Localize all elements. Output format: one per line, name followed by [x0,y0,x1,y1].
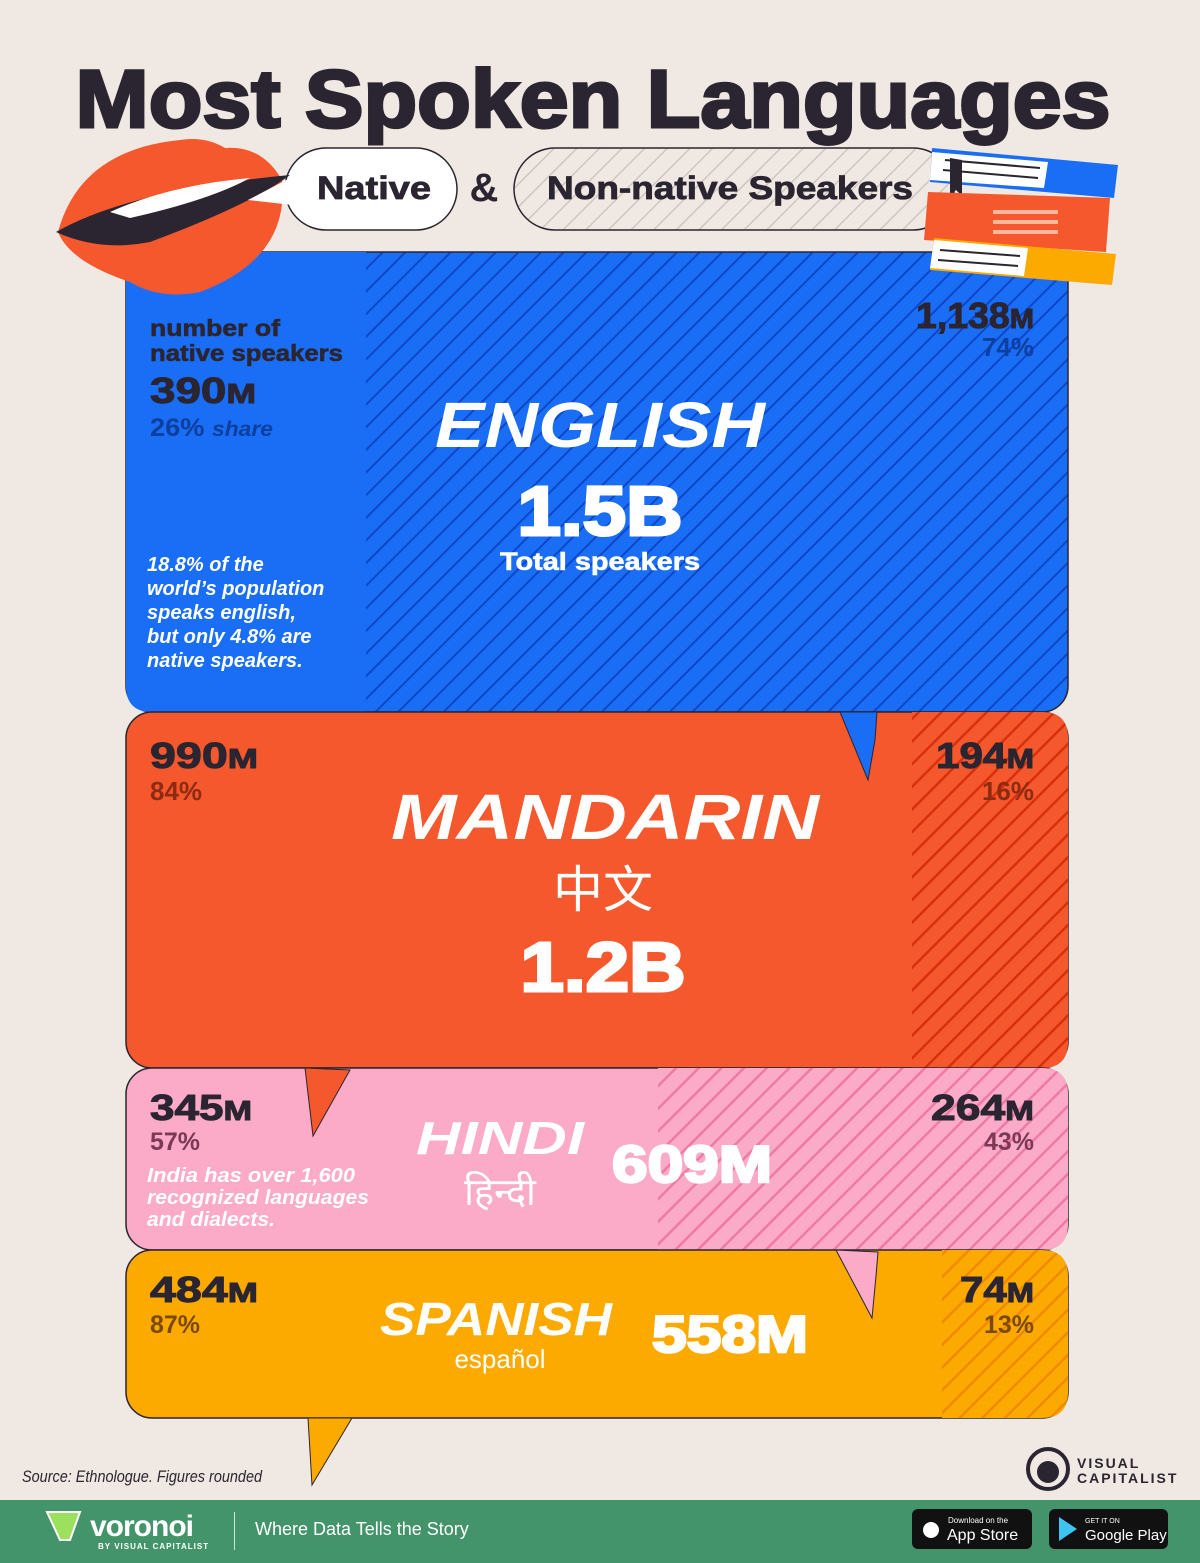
icon: books [924,148,1118,285]
hindi non-native value: 264 M [931,1087,1034,1128]
english panel: Total speakers [500,548,700,576]
spanish total: 558M [652,1306,808,1364]
english note: 18.8% of the [147,554,264,576]
english name: ENGLISH [435,389,767,461]
hindi note: and dialects. [147,1209,275,1231]
visual capitalist logo: VISUAL [1077,1455,1140,1471]
english native value: 390 M [150,370,256,411]
hindi note: India has over 1,600 [147,1165,355,1187]
subtitle: non-native pill: Non-native Speakers [547,170,913,206]
footer bar: BY VISUAL CAPITALIST [98,1542,209,1551]
english panel [126,252,1068,712]
title: Most Spoken Languages [76,54,1110,145]
subtitle: non-native pill [514,148,954,230]
hindi total: 609M [612,1136,772,1194]
hindi note: recognized languages [147,1187,369,1209]
visual capitalist logo [1028,1449,1178,1489]
hindi panel [126,1068,1068,1250]
spanish panel [126,1250,1068,1485]
mandarin native value: 990 M [150,735,258,776]
mandarin panel: 84% [150,776,202,806]
spanish native value: 484 M [150,1269,258,1310]
hindi panel: 57% [150,1128,200,1156]
visual capitalist logo: CAPITALIST [1077,1470,1178,1486]
english note: native speakers. [147,650,303,672]
hindi native value: 345 M [150,1087,252,1128]
app store badge: App Store [947,1527,1018,1544]
subtitle: native pill [285,148,457,230]
mandarin name: MANDARIN [391,781,821,853]
hindi name: HINDI [416,1112,586,1164]
english panel: 74% [982,332,1034,362]
tagline: Where Data Tells the Story [255,1519,469,1539]
english non-native value: 1,138M [916,295,1034,336]
google play badge: Google Play [1085,1527,1167,1544]
english native label: number of [150,315,280,341]
mandarin non-native value: 194 M [936,735,1034,776]
app store badge: Download on the [948,1516,1009,1525]
google play badge [1049,1509,1168,1549]
app store badge [912,1509,1032,1549]
english panel: 26% share [150,414,273,442]
voronoi logo [47,1512,80,1540]
spanish tail from hindi [836,1250,878,1318]
mandarin total: 1.2B [520,928,686,1006]
mandarin panel: 中文 [553,850,653,922]
mandarin panel [126,712,1068,1068]
mandarin panel: 16% [982,776,1034,806]
hindi panel: 43% [984,1128,1034,1156]
english panel: native speakers [150,340,343,366]
hindi panel: हिन्दी [464,1170,537,1214]
icon: lips [56,139,292,294]
spanish panel: 13% [984,1311,1034,1339]
source: Source: Ethnologue. Figures rounded [22,1467,262,1486]
subtitle: native pill: Native [317,170,431,206]
spanish name: SPANISH [380,1293,613,1345]
subtitle: ampersand: & [470,166,498,210]
footer bar: voronoi [90,1510,193,1543]
footer bar [0,1500,1200,1563]
google play badge: GET IT ON [1085,1518,1120,1525]
spanish panel: 87% [150,1311,200,1339]
english note: world’s population [147,578,324,600]
english note: but only 4.8% are [147,626,312,648]
spanish panel: español [454,1344,546,1374]
mandarin tail from english [840,712,877,780]
english note: speaks english, [147,602,296,624]
hindi tail from mandarin [305,1068,350,1136]
spanish non-native value: 74M [960,1269,1034,1310]
english total: 1.5B [518,472,682,550]
spanish tail down [308,1418,352,1485]
